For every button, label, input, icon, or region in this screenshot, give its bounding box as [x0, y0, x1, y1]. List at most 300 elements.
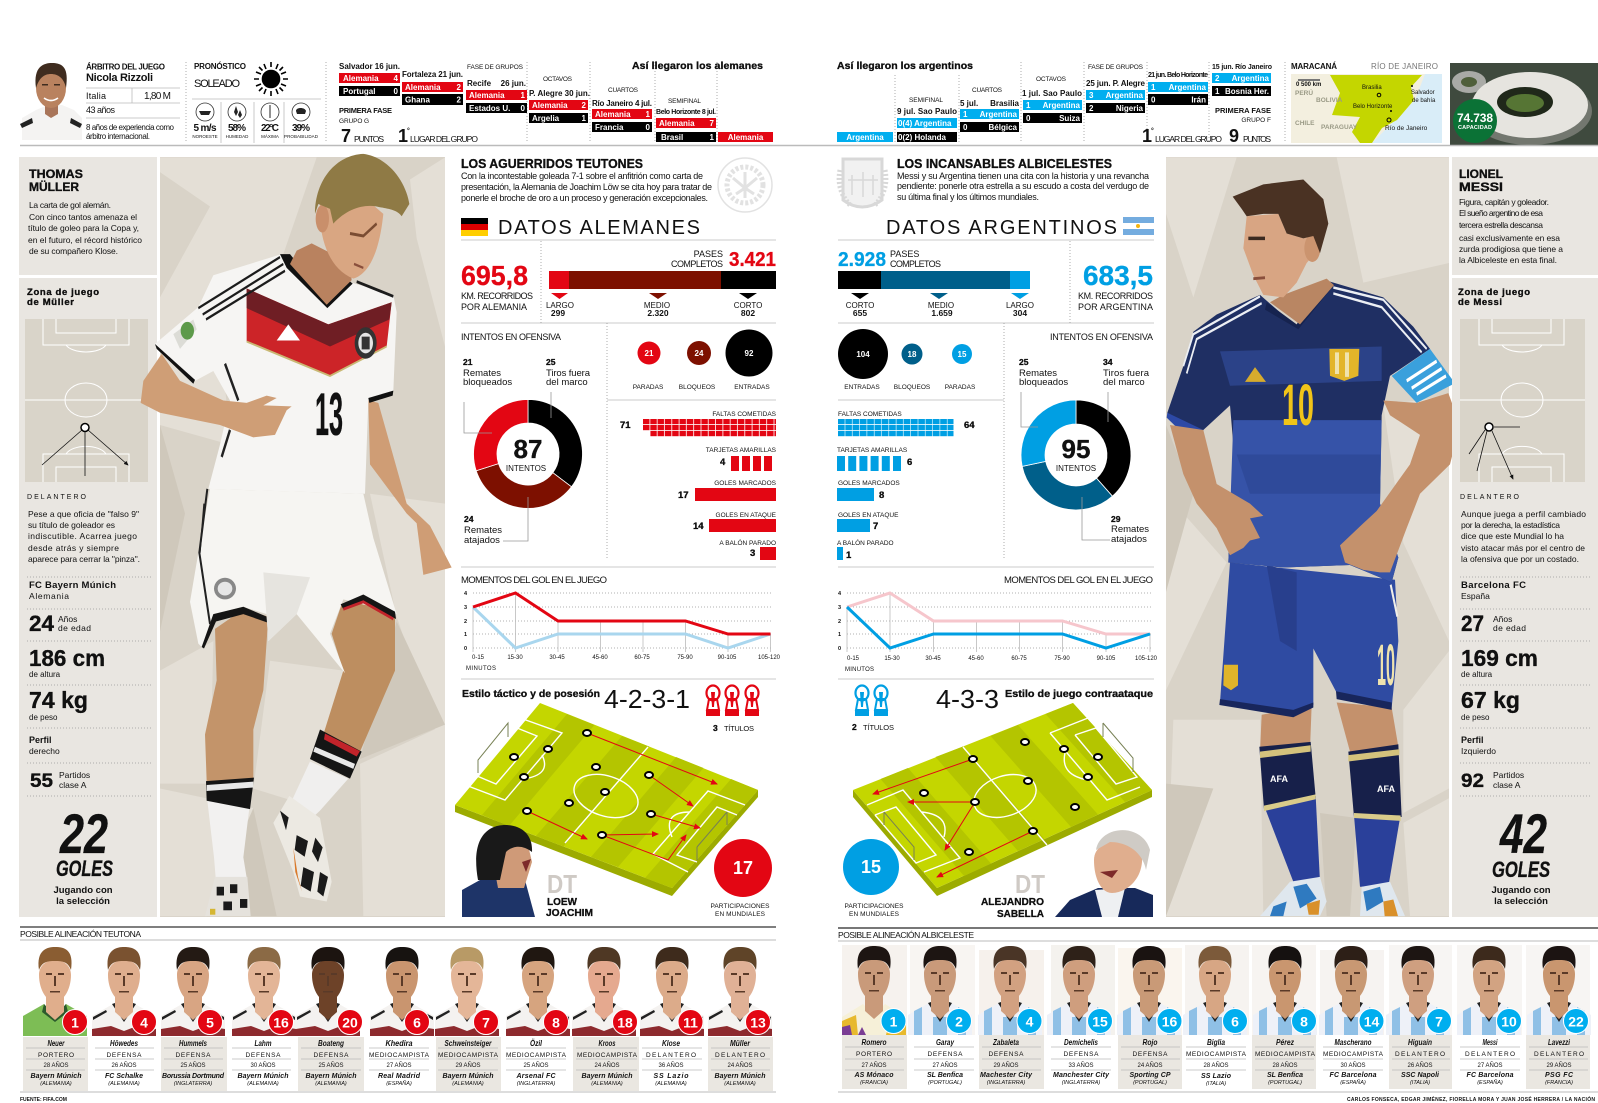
player card: Garay: 27 AÑOS [932, 1062, 958, 1069]
stat: km recorridos Argentina: 683,5 [1083, 260, 1153, 291]
heading: Thomas Müller [29, 169, 83, 194]
player card: Khedira: Khedira [386, 1039, 413, 1048]
path of Germany: 1 [521, 91, 526, 100]
player card: Messi: DELANTERO [1465, 1051, 1515, 1058]
bubbles: entradas, bloqueos, paradas: BLOQUEOS [894, 384, 931, 391]
stats: Messi: de edad [1493, 623, 1526, 633]
player card: Klose: 11 [683, 1014, 698, 1030]
bars: faltas, tarjetas, goles: GOLES MARCADOS [714, 480, 777, 487]
path of Argentina: 1 jul. Sao Paulo [1022, 89, 1082, 98]
player card: Schweinsteiger [435, 947, 501, 1091]
path of Argentina: Argentina [980, 110, 1018, 119]
path of Argentina: FASE DE GRUPOS [1088, 64, 1144, 71]
chart: pases completos Argentina: 655 [853, 308, 867, 318]
player card: Higuaín [1386, 945, 1452, 1089]
icon: AFA shield [839, 159, 886, 207]
player card: Rojo: (PORTUGAL) [1133, 1080, 1167, 1086]
Maracaná location map: MARACANÁ [1291, 62, 1337, 71]
sock crests: AFA [1377, 784, 1396, 794]
bubbles: paradas, bloqueos, entradas [633, 330, 772, 391]
player card: Özil: 25 AÑOS [524, 1062, 548, 1069]
player card: Lavezzi: 29 AÑOS [1546, 1062, 1572, 1069]
player card: Khedira: 6 [413, 1014, 421, 1030]
Maracaná location map: 0 500 km [1296, 82, 1321, 88]
bubbles: paradas, bloqueos, entradas: ENTRADAS [734, 384, 770, 391]
sock crests [1270, 774, 1396, 794]
formation: Alemania 4-2-3-1: TÍTULOS [724, 724, 754, 733]
donut: intentos en ofensiva Alemania: 24 [464, 514, 474, 524]
stats: Müller: de peso [29, 713, 58, 722]
icon: German flag [461, 218, 488, 236]
coach label: Joachim Löw: DT [547, 869, 577, 899]
donut: intentos en ofensiva Alemania: atajados [464, 535, 500, 546]
icon: Argentine flag [1123, 217, 1154, 235]
lineup heading Germany: POSIBLE ALINEACIÓN TEUTONA [20, 929, 141, 939]
player card: Demichelis: Demichelis [1064, 1038, 1098, 1047]
referee details: Nicola Rizzoli [86, 72, 153, 84]
stats: Müller: de altura [29, 670, 61, 679]
player card: Höwedes [92, 947, 156, 1087]
player card: Garay: Garay [936, 1038, 954, 1047]
line chart: momentos del gol Alemania: 45-60 [592, 655, 608, 661]
path of Argentina: Argentina [846, 133, 884, 142]
player card: Lahm: 16 [273, 1014, 289, 1030]
leg: viewer left [205, 609, 268, 781]
arm: viewer left [1170, 425, 1263, 555]
chart: pases completos Alemania: MEDIO [644, 301, 670, 310]
player card: Müller: 24 AÑOS [728, 1062, 752, 1069]
goals: 42: GOLES [1492, 857, 1550, 882]
bubbles: entradas, bloqueos, paradas: PARADAS [945, 384, 976, 391]
coach photo: Alejandro Sabella [1055, 830, 1153, 917]
donut: intentos en ofensiva Argentina: 95 [1062, 434, 1090, 464]
player card: Biglia [1183, 945, 1249, 1087]
donut: intentos en ofensiva Argentina: INTENTOS [1056, 464, 1096, 473]
player card: Mascherano: FC Barcelona [1330, 1072, 1377, 1079]
goals: 22: la selección [56, 896, 110, 907]
stats: Messi: Perfil [1461, 735, 1484, 745]
stats: Messi [1461, 580, 1538, 792]
badge: 15 participaciones [843, 839, 904, 918]
bubbles: entradas, bloqueos, paradas [838, 329, 976, 391]
Maracaná location map: Salvador [1411, 90, 1435, 96]
Maracaná location map: Belo Horizonte [1353, 104, 1393, 110]
badge: 15 participaciones: 15 [861, 857, 881, 877]
forecast [192, 62, 321, 143]
coach label: Alejandro Sabella: SABELLA [997, 908, 1044, 920]
player card: Romero: Romero [862, 1038, 887, 1047]
player card: Höwedes: DEFENSA [106, 1052, 142, 1059]
goals: 42: 42 [1499, 802, 1547, 865]
player card: Zabaleta: 4 [1026, 1014, 1034, 1030]
player card: Lahm [232, 947, 296, 1087]
player card: Müller: 13 [750, 1014, 766, 1030]
path of Argentina: 1 [1151, 83, 1156, 92]
donut: intentos en ofensiva Argentina: INTENTOS EN OFENSIVA [1050, 332, 1153, 342]
player card: Kroos: 24 AÑOS [594, 1062, 620, 1069]
donut: intentos en ofensiva Argentina: Tiros fuera [1103, 368, 1150, 379]
title: Así llegaron los argentinos: Así llegaron los argentinos [837, 60, 973, 72]
position label: DELANTERO [1460, 494, 1520, 501]
header: Los incansables albicelestes: Messi y su Argentina tienen una cita con la historia y una revancha [897, 171, 1149, 181]
player card: Biglia: 28 AÑOS [1204, 1062, 1228, 1069]
line chart: momentos del gol Argentina: 75-90 [1054, 656, 1070, 662]
referee details: árbitro internacional. [86, 132, 150, 141]
text: intro Müller: Con cinco tantos amenaza el [29, 212, 137, 222]
player card: Lahm: DEFENSA [246, 1052, 281, 1059]
forecast: HUMEDAD [226, 134, 249, 139]
player card: Garay: SL Benfica [927, 1072, 963, 1079]
heading: zona de juego: Zona de juego [1458, 287, 1530, 298]
player card: Biglia: Biglia [1207, 1038, 1225, 1047]
bars: faltas, tarjetas, goles Argentina: GOLES MARCADOS [838, 480, 900, 487]
player card: Hummels: Hummels [179, 1039, 207, 1048]
referee details: 8 años de experiencia como [86, 123, 175, 132]
player card: Kroos: 18 [617, 1014, 633, 1030]
player card: Romero [842, 945, 907, 1089]
path of Germany: GRUPO G [339, 118, 369, 125]
line chart: momentos del gol Alemania: 30-45 [549, 655, 565, 661]
line chart: momentos del gol Alemania: 4 [464, 591, 468, 597]
player card: Rojo: Rojo [1142, 1038, 1158, 1047]
player card: Messi: Messi [1482, 1038, 1498, 1047]
player card: Boateng: Bayern Múnich [306, 1073, 356, 1080]
path of Argentina: LUGAR DEL GRUPO [1155, 134, 1222, 144]
line chart: momentos del gol Alemania: 2 [464, 619, 467, 625]
sock crests: AFA [1270, 774, 1289, 784]
header: Los aguerridos teutones: Con la incontestable goleada 7-1 sobre el anfitrión como carta de [461, 171, 703, 181]
header: Los incansables albicelestes [897, 157, 1149, 202]
donut: intentos en ofensiva Argentina [1019, 332, 1153, 545]
bars: faltas, tarjetas, goles Argentina: FALTAS COMETIDAS [838, 411, 902, 418]
forecast: 58% [228, 123, 246, 134]
coach label: Joachim Löw: JOACHIM [546, 907, 593, 919]
player card: Demichelis: (INGLATERRA) [1062, 1080, 1100, 1086]
bubbles: entradas, bloqueos, paradas: 15 [958, 350, 967, 359]
panel: Thomas Müller profile [19, 157, 157, 917]
stats: Müller: 24 [29, 611, 55, 636]
line chart: momentos del gol Argentina: 30-45 [925, 656, 941, 662]
player card: Müller: Müller [730, 1039, 751, 1048]
player card: Müller: DELANTERO [715, 1052, 765, 1059]
player card: Zabaleta [978, 946, 1044, 1089]
player card: Rojo: Sporting CP [1130, 1072, 1171, 1079]
bars: faltas, tarjetas, goles: 17 [678, 490, 689, 501]
player card: Demichelis [1047, 945, 1115, 1086]
forecast: 5 m/s [194, 123, 217, 134]
player card: Biglia: (ITALIA) [1206, 1081, 1226, 1087]
player card: Higuaín: SSC Napoli [1401, 1072, 1440, 1079]
icon: sun [254, 62, 288, 96]
pitch: Müller zone [25, 319, 148, 482]
path of Germany: Salvador 16 jun. [339, 62, 400, 71]
player card: Demichelis: 15 [1092, 1014, 1108, 1030]
stats: Messi: 67 kg [1461, 687, 1520, 713]
path of Argentina: 25 jun. P. Alegre [1086, 79, 1146, 88]
player card: Boateng: 25 AÑOS [318, 1062, 344, 1069]
player card: Mascherano [1319, 946, 1384, 1086]
goals: 42: Jugando con [1491, 885, 1551, 896]
line chart: momentos del gol Argentina: MOMENTOS DEL GOL EN EL JUEGO [1004, 575, 1153, 586]
line chart: momentos del gol Alemania: MINUTOS [466, 666, 496, 672]
text: intro Messi: El sueño argentino de esa [1459, 208, 1543, 218]
player card: Hummels: (INGLATERRA) [174, 1081, 212, 1087]
path of Germany: 2 [457, 83, 462, 92]
header: Los incansables albicelestes: pendiente: ponerle otra estrella a su escudo a costa del verdugo de [897, 181, 1149, 191]
player card: Garay: 2 [955, 1014, 963, 1030]
player card: Pérez: 8 [1300, 1014, 1308, 1030]
path of Argentina: Suiza [1059, 114, 1081, 123]
player card: Boateng: Boateng [318, 1039, 344, 1048]
chart: pases completos Argentina: 304 [1013, 308, 1027, 318]
player card: Mascherano: 30 AÑOS [1340, 1062, 1366, 1069]
line chart: momentos del gol Argentina: 1 [838, 632, 841, 638]
goals: 42: la selección [1494, 896, 1548, 907]
path of Argentina: 1 [1215, 87, 1220, 96]
player card: Klose: 36 AÑOS [658, 1062, 684, 1069]
path of Germany: 1 [646, 110, 651, 119]
photo: Thomas Müller: 13 [315, 381, 343, 448]
player card: Schweinsteiger: Bayern Múnich [442, 1073, 494, 1080]
player card: Khedira: 27 AÑOS [386, 1062, 412, 1069]
player card: Lavezzi: 22 [1568, 1014, 1584, 1030]
text: intro Messi: tercera estrella descansa [1459, 220, 1543, 230]
path of Argentina: Nigeria [1116, 104, 1144, 113]
path of Argentina: 9 [1229, 126, 1239, 146]
badge: 17 participaciones: EN MUNDIALES [715, 911, 766, 918]
text: Müller description: su título de goleador es [28, 520, 115, 530]
player card: Klose: (ALEMANIA) [655, 1081, 687, 1087]
player card: Biglia: SS Lazio [1201, 1073, 1232, 1080]
text: Messi description: dice que este Mundial lo ha [1461, 531, 1564, 541]
donut: intentos en ofensiva Alemania: 87 [514, 434, 542, 464]
shorts [190, 489, 397, 673]
stats: Messi: de peso [1461, 713, 1490, 722]
text: Messi description: Aunque juega a perfil cambiado [1461, 509, 1586, 519]
player card: Lavezzi: (FRANCIA) [1545, 1080, 1573, 1086]
player card: Rojo: DEFENSA [1132, 1051, 1168, 1058]
line chart: momentos del gol Argentina: 15-30 [884, 656, 900, 662]
path of Germany: FASE DE GRUPOS [467, 64, 524, 71]
text: Müller description: aparece para cerrar la "pinza". [28, 554, 140, 564]
chart: pases completos Alemania: CORTO [734, 301, 762, 310]
line chart: momentos del gol Alemania: 105-120 [758, 655, 781, 661]
coach label: Joachim Löw [546, 869, 593, 919]
bars: faltas, tarjetas, goles Argentina: A BALÓN PARADO [837, 538, 894, 547]
line chart: momentos del gol Alemania: 15-30 [507, 655, 523, 661]
bubbles: entradas, bloqueos, paradas: 18 [908, 350, 917, 359]
bubbles: paradas, bloqueos, entradas: 92 [745, 349, 754, 358]
path of Argentina: 2 [1215, 74, 1220, 83]
player card: Pérez: (PORTUGAL) [1268, 1080, 1302, 1086]
header: Los aguerridos teutones: LOS AGUERRIDOS TEUTONES [461, 157, 643, 171]
formation: Alemania 4-2-3-1: Estilo táctico y de posesión [462, 688, 600, 700]
player card: Klose [640, 947, 704, 1087]
player card: Boateng [296, 947, 364, 1091]
text: Müller description: Pese a que oficia de "falso 9" [28, 509, 139, 519]
bars: faltas, tarjetas, goles: GOLES EN ATAQUE [716, 512, 777, 519]
player card: Kroos: (ALEMANIA) [591, 1081, 623, 1087]
path of Argentina: Argentina [1106, 91, 1144, 100]
path of Germany: PUNTOS [354, 134, 384, 144]
player card: Lavezzi: PSG FC [1545, 1072, 1574, 1079]
donut: intentos en ofensiva Alemania: Remates [463, 368, 501, 379]
player card: Lahm: 30 AÑOS [250, 1062, 276, 1069]
player card: Müller [708, 947, 773, 1091]
bars: faltas, tarjetas, goles: 71 [620, 420, 631, 431]
Maracaná location map: RÍO DE JANEIRO [1371, 62, 1438, 71]
captain band [1392, 349, 1455, 403]
player card: Romero: AS Mónaco [854, 1072, 894, 1079]
heading: zona de juego: Zona de juego [27, 287, 99, 298]
path of Germany: Alemania [343, 74, 379, 83]
text: intro Müller: título de goleo para la Copa y, [28, 223, 139, 233]
header: Los incansables albicelestes: LOS INCANSABLES ALBICELESTES [897, 157, 1112, 171]
Maracaná location map: Brasilia [1362, 85, 1382, 91]
stats: Messi: Izquierdo [1461, 746, 1496, 756]
player card: Höwedes: Höwedes [110, 1039, 138, 1048]
chart: pases completos Alemania: 802 [741, 308, 755, 318]
chart: pases completos Alemania: 3.421 [729, 249, 776, 271]
head [1270, 279, 1334, 324]
lineup: Germany [20, 927, 776, 1092]
line chart: momentos del gol Argentina: 4 [838, 591, 842, 597]
chart: pases completos Argentina [838, 249, 1034, 318]
chart: pases completos Argentina: LARGO [1006, 301, 1034, 310]
path of Germany: OCTAVOS [543, 76, 573, 83]
player card: Neuer: 28 AÑOS [44, 1062, 68, 1069]
badge: 15 participaciones: EN MUNDIALES [849, 911, 900, 918]
photo: Lionel Messi: 10 [1377, 633, 1395, 698]
player card: Biglia: MEDIOCAMPISTA [1186, 1051, 1247, 1058]
stats: Müller: 55 [30, 771, 53, 792]
player card: Schweinsteiger: 29 AÑOS [456, 1062, 480, 1069]
path of Germany: Río Janeiro 4 jul. [592, 99, 652, 108]
text: intro Messi: zurda prodigiosa que tiene a [1459, 244, 1563, 254]
player card: Messi: (ESPAÑA) [1477, 1079, 1503, 1086]
player card: Zabaleta: 29 AÑOS [994, 1062, 1018, 1069]
stats: Müller: Partidos [59, 770, 90, 780]
player card: Neuer: 1 [71, 1014, 79, 1030]
player card: Kroos: MEDIOCAMPISTA [577, 1052, 638, 1059]
heading: zona de juego: de Müller [27, 297, 74, 308]
player card: Kroos: Kroos [598, 1039, 616, 1048]
Maracaná stadium photo with capacity badge: 74.738 [1457, 111, 1493, 125]
player card: Higuaín: 26 AÑOS [1408, 1062, 1432, 1069]
heading: zona de juego [1458, 287, 1530, 308]
footer credits [20, 1095, 1595, 1103]
player card: Mascherano: 14 [1364, 1014, 1379, 1030]
tactical pitch: Alemania [455, 703, 758, 896]
player card: Khedira [369, 947, 434, 1087]
Maracaná location map [1291, 62, 1442, 143]
player card: Özil [506, 947, 570, 1087]
stats: Messi: Partidos [1493, 770, 1524, 780]
player card: Lahm: Bayern Múnich [238, 1073, 288, 1080]
player card: Rojo [1117, 946, 1182, 1089]
formation: Alemania 4-2-3-1: 3 [713, 723, 718, 733]
path of Argentina: Brasilia [990, 99, 1020, 108]
donut: intentos en ofensiva Argentina: Remates [1019, 368, 1057, 379]
header: Los aguerridos teutones [461, 157, 712, 203]
path of Argentina: 2 [1089, 104, 1094, 113]
text: Müller description [28, 509, 140, 564]
line chart: momentos del gol Alemania: 75-90 [677, 655, 693, 661]
bars: faltas, tarjetas, goles Argentina: 7 [873, 521, 878, 532]
player card: Romero: 27 AÑOS [862, 1062, 886, 1069]
path of Argentina: OCTAVOS [1036, 76, 1067, 83]
player card: Zabaleta: Machester City [980, 1072, 1033, 1079]
stats: Müller: de edad [58, 623, 91, 633]
bars: faltas, tarjetas, goles: FALTAS COMETIDAS [712, 411, 777, 418]
forecast: 39% [292, 123, 310, 134]
Maracaná stadium photo with capacity badge [1450, 63, 1598, 145]
coach label: Alejandro Sabella [981, 869, 1045, 920]
path of Argentina: 1 [1026, 101, 1031, 110]
path of Germany: Alemania [532, 101, 568, 110]
player card: Hummels [161, 947, 227, 1091]
player card: Higuaín: Higuaín [1408, 1038, 1432, 1047]
text: Messi description [1461, 509, 1586, 564]
bars: faltas, tarjetas, goles Argentina: GOLES EN ATAQUE [838, 512, 899, 519]
player card: Demichelis: DEFENSA [1064, 1051, 1099, 1058]
player card: Neuer: Neuer [48, 1039, 65, 1048]
stat: km recorridos Argentina [1078, 260, 1153, 312]
stats: Messi: 27 [1461, 611, 1484, 636]
line chart: momentos del gol Argentina: 60-75 [1011, 656, 1027, 662]
chart: pases completos Alemania: LARGO [546, 301, 574, 310]
path of Argentina: Bosnia Her. [1225, 87, 1269, 96]
formation: Alemania 4-2-3-1 [462, 684, 759, 733]
badge: 15 participaciones: PARTICIPACIONES [844, 903, 904, 910]
line chart: momentos del gol Alemania: 1 [464, 632, 467, 638]
bars: faltas, tarjetas, goles Argentina: 6 [907, 457, 912, 468]
bars: faltas, tarjetas, goles Argentina: 8 [879, 490, 884, 501]
donut: intentos en ofensiva Argentina: 29 [1111, 514, 1121, 524]
player card: Schweinsteiger: MEDIOCAMPISTA [438, 1052, 499, 1059]
player card: Schweinsteiger: 7 [482, 1014, 490, 1030]
donut: intentos en ofensiva Argentina: 25 [1019, 357, 1029, 367]
forecast: NOROESTE [192, 134, 218, 139]
path of Argentina [837, 64, 1272, 146]
path of Germany: Estados U. [469, 104, 510, 113]
path of Germany: Alemania [659, 119, 695, 128]
donut: intentos en ofensiva Alemania: Tiros fuera [546, 368, 591, 379]
heading: Thomas Müller: MÜLLER [29, 181, 80, 194]
chart: pases completos Alemania [546, 249, 776, 318]
goals: 22: 22 [59, 802, 108, 865]
path of Germany: 0 [646, 123, 651, 132]
stats: Müller: Perfil [29, 735, 52, 745]
text: intro Müller: de su compañero Klose. [29, 246, 118, 256]
donut: intentos en ofensiva Alemania: 21 [463, 357, 473, 367]
photo: Lionel Messi: 10 [1282, 373, 1314, 438]
donut: intentos en ofensiva Argentina: Remates [1111, 524, 1149, 535]
donut: intentos en ofensiva Argentina: atajados [1111, 534, 1147, 545]
path of Argentina: SEMIFINAL [909, 97, 943, 104]
line chart: momentos del gol Alemania: MOMENTOS DEL GOL EN EL JUEGO [461, 575, 607, 586]
coach label: Alejandro Sabella: DT [1015, 869, 1045, 899]
legs [1260, 705, 1312, 752]
stat: km recorridos Alemania: KM. RECORRIDOS [461, 291, 533, 301]
formation: Argentina 4-3-3: Estilo de juego contraataque [1005, 688, 1153, 700]
player card: Özil: MEDIOCAMPISTA [506, 1052, 567, 1059]
player card: Higuaín: 7 [1435, 1014, 1443, 1030]
line chart: momentos del gol Alemania: 3 [464, 605, 467, 611]
player card: Schweinsteiger: (ALEMANIA) [452, 1081, 484, 1087]
formation: Argentina 4-3-3 [852, 684, 1153, 732]
pitch: Messi zone [1460, 319, 1585, 482]
